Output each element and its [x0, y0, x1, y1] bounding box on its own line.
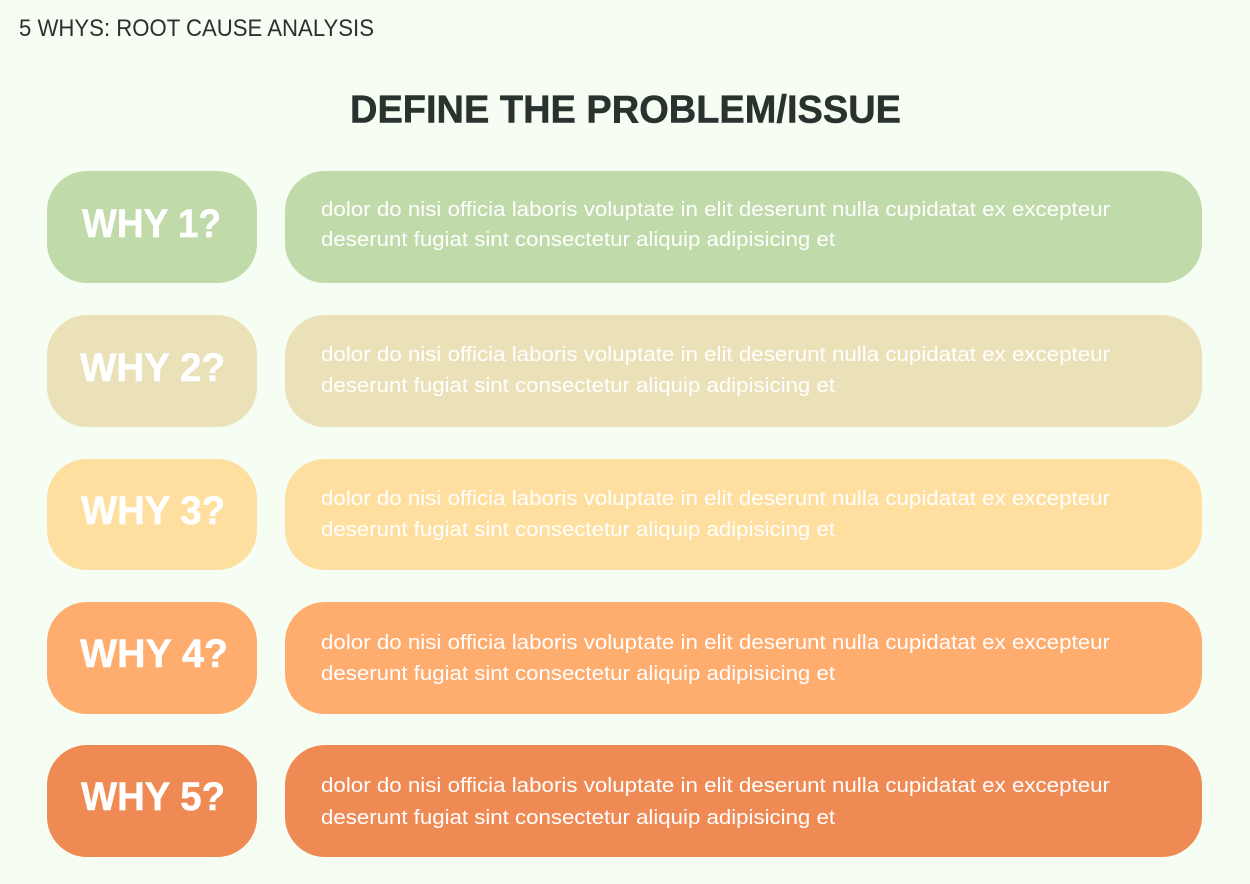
why 1 text panel: deserunt fugiat sint consectetur aliquip adipisicing et [321, 229, 835, 251]
why 4 text panel [285, 602, 1202, 714]
why 1 label pill [47, 171, 257, 283]
row: why 4 [47, 602, 1202, 714]
why 5 label pill [47, 745, 257, 857]
why 2 text panel: dolor do nisi officia laboris voluptate in elit deserunt nulla cupidatat ex excepteur [321, 344, 1110, 366]
why 3 text panel [285, 459, 1202, 570]
why 3 text panel: deserunt fugiat sint consectetur aliquip adipisicing et [321, 519, 835, 541]
why 3 label pill: WHY 3? [81, 489, 225, 533]
row: why 3 [47, 459, 1202, 570]
why 5 label pill: WHY 5? [81, 775, 225, 819]
why 1 text panel [285, 171, 1202, 283]
row: why 1 [47, 171, 1202, 283]
why 4 label pill [47, 602, 257, 714]
title: DEFINE THE PROBLEM/ISSUE [350, 88, 901, 132]
page label: 5 WHYS: ROOT CAUSE ANALYSIS [19, 15, 374, 42]
why 1 text panel: dolor do nisi officia laboris voluptate in elit deserunt nulla cupidatat ex excepteur [321, 199, 1110, 221]
why 2 label pill: WHY 2? [80, 346, 225, 390]
why 1 label pill: WHY 1? [82, 202, 221, 246]
why 3 label pill [47, 459, 257, 570]
why 4 text panel: deserunt fugiat sint consectetur aliquip adipisicing et [321, 663, 835, 685]
why 4 text panel: dolor do nisi officia laboris voluptate in elit deserunt nulla cupidatat ex excepteur [321, 632, 1110, 654]
row: why 2 [47, 315, 1202, 427]
row: why 5 [47, 745, 1202, 857]
why 5 text panel [285, 745, 1202, 857]
why 5 text panel: dolor do nisi officia laboris voluptate in elit deserunt nulla cupidatat ex excepteur [321, 775, 1110, 797]
why 2 text panel [285, 315, 1202, 427]
why 4 label pill: WHY 4? [80, 632, 228, 676]
why 2 text panel: deserunt fugiat sint consectetur aliquip adipisicing et [321, 375, 835, 397]
why 3 text panel: dolor do nisi officia laboris voluptate in elit deserunt nulla cupidatat ex excepteur [321, 488, 1110, 510]
why 5 text panel: deserunt fugiat sint consectetur aliquip adipisicing et [321, 807, 835, 829]
why 2 label pill [47, 315, 257, 427]
